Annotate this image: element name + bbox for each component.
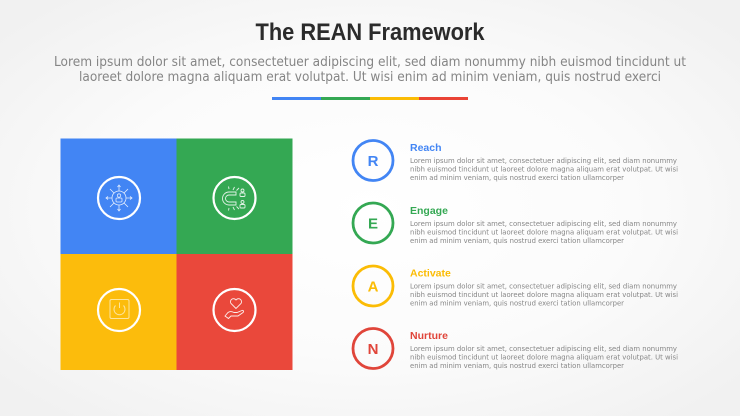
item: nurture <box>353 328 678 370</box>
icon: magnet with people <box>222 186 245 210</box>
four-colour divider rule <box>272 97 468 100</box>
icon: heart on hand <box>225 299 244 318</box>
panel: reach quadrant <box>60 138 176 254</box>
item: reach: nibh euismod tincidunt ut laoreet dolore magna aliquam erat volutpat. Ut wisi <box>410 164 678 174</box>
subtitle text block: Lorem ipsum dolor sit amet, consectetuer adipiscing elit, sed diam nonummy nibh euismod tincidunt ut <box>54 55 686 70</box>
item: activate: nibh euismod tincidunt ut laoreet dolore magna aliquam erat volutpat. Ut wisi <box>410 290 678 299</box>
panel: activate quadrant <box>60 254 176 370</box>
icon: power button <box>110 300 129 318</box>
item: reach: enim ad minim veniam, quis nostrud exerci tation ullamcorper <box>410 173 625 182</box>
item: engage: Lorem ipsum dolor sit amet, consectetuer adipiscing elit, sed diam nonummy <box>410 219 678 228</box>
item: reach: Reach <box>410 142 442 154</box>
item: reach: Lorem ipsum dolor sit amet, consectetuer adipiscing elit, sed diam nonummy <box>410 156 678 165</box>
REAN quadrant grid <box>60 138 292 370</box>
item: engage: Engage <box>410 205 448 217</box>
item: reach <box>353 140 678 182</box>
item: nurture: Nurture <box>410 330 448 342</box>
item: nurture: nibh euismod tincidunt ut laoreet dolore magna aliquam erat volutpat. Ut wisi <box>410 352 678 362</box>
item: activate: Lorem ipsum dolor sit amet, consectetuer adipiscing elit, sed diam nonummy <box>410 282 678 290</box>
icon: network person <box>106 185 132 211</box>
subtitle text block: laoreet dolore magna aliquam erat volutpat. Ut wisi enim ad minim veniam, quis nostrud exerci <box>79 70 661 85</box>
item: nurture: enim ad minim veniam, quis nostrud exerci tation ullamcorper <box>410 361 625 370</box>
item: nurture: N <box>368 341 378 358</box>
panel: nurture quadrant <box>176 254 292 370</box>
item: activate: A <box>368 278 379 296</box>
item: reach: R <box>368 153 379 170</box>
item: engage <box>353 203 678 245</box>
panel: engage quadrant <box>176 138 292 254</box>
subtitle text block <box>54 55 686 85</box>
title: The REAN Framework <box>256 19 485 46</box>
item: activate: enim ad minim veniam, quis nostrud exerci tation ullamcorper <box>410 298 625 308</box>
item: engage: enim ad minim veniam, quis nostrud exerci tation ullamcorper <box>410 236 625 245</box>
item: engage: E <box>368 216 378 232</box>
item: engage: nibh euismod tincidunt ut laoreet dolore magna aliquam erat volutpat. Ut wisi <box>410 228 678 236</box>
item: activate <box>353 266 678 308</box>
item: nurture: Lorem ipsum dolor sit amet, consectetuer adipiscing elit, sed diam nonummy <box>410 344 678 353</box>
item: activate: Activate <box>410 268 451 280</box>
